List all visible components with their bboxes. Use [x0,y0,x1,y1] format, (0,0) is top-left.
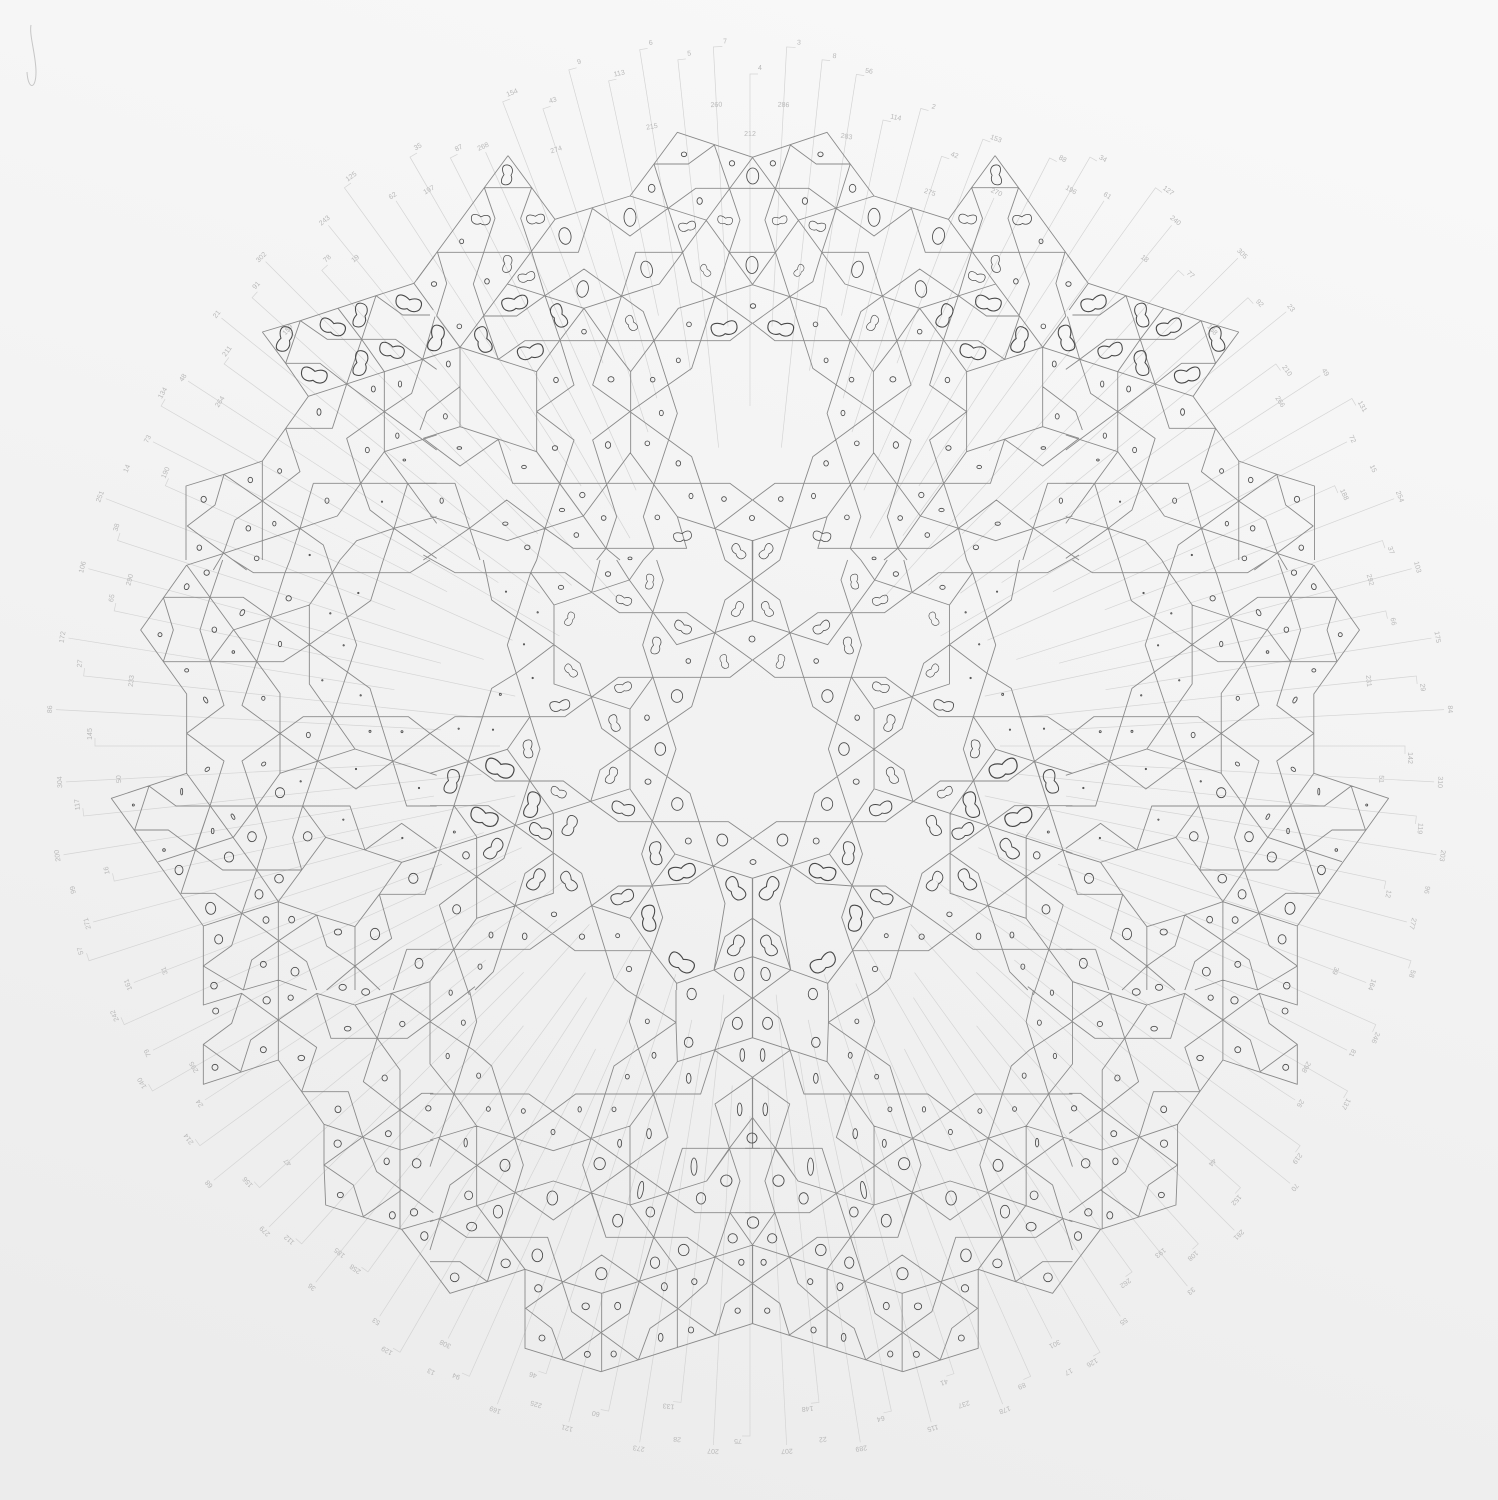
radial fan of leader lines with perimeter numbers: 75 [734,1437,742,1444]
lattice block: upper centre [410,132,753,561]
blobs: upper centre [427,152,747,561]
radial fan of leader lines with perimeter numbers: 65 [108,594,117,603]
radial fan of leader lines with perimeter numbers: 9 [576,58,582,66]
radial fan of leader lines with perimeter numbers: 27 [77,659,84,668]
radial fan of leader lines with perimeter numbers: 35 [413,142,423,152]
radial fan of leader lines with perimeter numbers: 16 [103,866,112,875]
radial fan of leader lines with perimeter numbers: 310 [1436,776,1443,788]
radial fan of leader lines with perimeter numbers: 200 [54,849,62,862]
radial fan of leader lines with perimeter numbers: 172 [59,631,67,644]
radial fan of leader lines with perimeter numbers: 113 [613,69,626,79]
radial fan of leader lines with perimeter numbers: 254 [1394,490,1405,504]
radial fan of leader lines with perimeter numbers: 231 [1364,675,1372,687]
radial fan of leader lines with perimeter numbers: 140 [137,1076,148,1090]
radial fan of leader lines with perimeter numbers: 4 [758,65,762,72]
radial fan of leader lines with perimeter numbers: 50 [116,775,123,783]
radial fan of leader lines with perimeter numbers: 134 [157,386,169,400]
radial fan of leader lines with perimeter numbers: 301 [1048,1338,1061,1349]
radial fan of leader lines with perimeter numbers: 305 [1235,248,1248,261]
radial fan of leader lines with perimeter numbers: 58 [1407,969,1416,978]
radial fan of leader lines with perimeter numbers: 260 [710,102,723,109]
radial fan of leader lines with perimeter numbers: 84 [1446,705,1453,714]
radial fan of leader lines with perimeter numbers: 185 [333,1246,347,1259]
radial fan of leader lines with perimeter numbers: 15 [1368,464,1377,474]
radial fan of leader lines with perimeter numbers: 23 [1285,303,1296,314]
radial fan of leader lines with perimeter numbers: 112 [283,1233,296,1246]
radial fan of leader lines with perimeter numbers: 103 [1412,561,1422,574]
radial fan of leader lines with perimeter numbers: 99 [69,885,78,894]
radial fan of leader lines with perimeter numbers: 96 [1422,885,1431,894]
lattice block: lower left [203,982,433,1267]
radial fan of leader lines with perimeter numbers: 14 [123,464,132,474]
radial fan of leader lines with perimeter numbers: 290 [125,573,135,587]
radial fan of leader lines with perimeter numbers: 119 [1415,823,1424,834]
radial fan of leader lines with perimeter numbers: 57 [76,946,86,956]
radial fan of leader lines with perimeter numbers: 304 [57,776,64,788]
radial fan of leader lines with perimeter numbers: 91 [252,280,262,291]
radial fan of leader lines with perimeter numbers: 219 [1290,1151,1303,1165]
radial fan of leader lines with perimeter numbers: 152 [1229,1193,1242,1206]
radial fan of leader lines with perimeter numbers: 51 [1377,775,1384,783]
radial fan of leader lines with perimeter numbers: 190 [161,466,172,480]
radial fan of leader lines with perimeter numbers: 298 [1300,1060,1312,1074]
radial fan of leader lines with perimeter numbers: 142 [1406,752,1413,764]
radial fan of leader lines with perimeter numbers: 281 [1232,1228,1245,1241]
radial fan of leader lines with perimeter numbers: 60 [591,1409,600,1417]
radial fan of leader lines with perimeter numbers: 7 [723,38,727,45]
radial fan of leader lines with perimeter numbers: 127 [1161,185,1175,198]
radial fan of leader lines with perimeter numbers: 55 [1118,1316,1129,1326]
radial fan of leader lines with perimeter numbers: 295 [188,1060,200,1074]
radial fan of leader lines with perimeter numbers: 42 [950,151,959,160]
radial fan of leader lines with perimeter numbers: 203 [1437,849,1446,862]
radial fan of leader lines with perimeter numbers: 39 [1330,966,1340,976]
radial fan of leader lines with perimeter numbers: 225 [530,1398,543,1409]
radial fan of leader lines with perimeter numbers: 8 [832,53,837,60]
radial fan of leader lines with perimeter numbers: 73 [143,434,153,444]
radial fan of leader lines with perimeter numbers: 131 [1356,400,1368,414]
lattice block: inner ring [423,540,753,998]
radial fan of leader lines with perimeter numbers: 115 [926,1423,939,1432]
radial fan of leader lines with perimeter numbers: 277 [1407,917,1417,930]
radial fan of leader lines with perimeter numbers: 211 [221,345,234,358]
radial fan of leader lines with perimeter numbers: 5 [687,50,692,58]
radial fan of leader lines with perimeter numbers: 246 [1369,1031,1381,1044]
radial fan of leader lines with perimeter numbers: 24 [195,1098,205,1108]
radial fan of leader lines with perimeter numbers: 207 [707,1447,719,1454]
radial fan of leader lines with perimeter numbers: 159 [282,323,295,337]
radial fan of leader lines with perimeter numbers: 137 [1339,1097,1351,1111]
blobs: inner ring [443,572,748,981]
radial fan of leader lines with perimeter numbers: 92 [1254,298,1265,309]
radial fan of leader lines with perimeter numbers: 106 [78,561,88,574]
radial fan of leader lines with perimeter numbers: 44 [1207,1157,1217,1167]
right half of the lattice, mirrored from the left [745,132,1389,1372]
radial fan of leader lines with perimeter numbers: 126 [1085,1356,1099,1368]
radial fan of leader lines with perimeter numbers: 188 [1338,488,1349,502]
blobs: upper left outer [197,294,423,561]
radial fan of leader lines with perimeter numbers: 266 [1274,395,1286,409]
radial fan of leader lines with perimeter numbers: 29 [1418,683,1426,692]
radial fan of leader lines with perimeter numbers: 242 [110,1009,121,1022]
blobs: lower left [212,989,431,1240]
radial fan of leader lines with perimeter numbers: 12 [1383,889,1392,898]
radial fan of leader lines with perimeter numbers: 2 [931,103,936,111]
radial fan of leader lines with perimeter numbers: 169 [489,1404,502,1415]
radial fan of leader lines with perimeter numbers: 53 [371,1316,382,1326]
radial fan of leader lines with perimeter numbers: 56 [865,68,873,76]
radial fan of leader lines with perimeter numbers: 19 [350,254,361,264]
radial fan of leader lines with perimeter numbers: 129 [380,1344,394,1356]
radial fan of leader lines with perimeter numbers: 81 [1347,1048,1357,1058]
radial fan of leader lines with perimeter numbers: 275 [923,188,936,198]
radial fan of leader lines with perimeter numbers: 87 [454,144,464,153]
radial fan of leader lines with perimeter numbers: 237 [957,1399,970,1409]
radial fan of leader lines with perimeter numbers: 196 [1064,184,1078,196]
radial fan of leader lines with perimeter numbers: 66 [1388,617,1397,626]
radial fan of leader lines with perimeter numbers: 38 [112,523,122,532]
radial fan of leader lines with perimeter numbers: 210 [1280,364,1293,378]
radial fan of leader lines with perimeter numbers: 197 [422,184,436,196]
blobs: middle left [132,570,423,990]
radial fan of leader lines with perimeter numbers: 3 [797,39,801,47]
radial fan of leader lines with perimeter numbers: 125 [345,171,358,183]
lattice block: lower centre [430,982,760,1372]
radial fan of leader lines with perimeter numbers: 68 [204,1178,215,1189]
radial fan of leader lines with perimeter numbers: 243 [318,215,332,227]
radial fan of leader lines with perimeter numbers: 26 [1295,1098,1305,1108]
signature mark [27,25,36,86]
radial fan of leader lines with perimeter numbers: 94 [451,1371,462,1380]
radial fan of leader lines with perimeter numbers: 279 [259,1224,272,1237]
radial fan of leader lines with perimeter numbers: 18 [1139,254,1150,264]
radial fan of leader lines with perimeter numbers: 161 [123,978,134,991]
lattice block: upper left outer [186,255,437,570]
radial fan of leader lines with perimeter numbers: 148 [801,1404,814,1412]
radial fan of leader lines with perimeter numbers: 175 [1433,631,1441,644]
radial fan of leader lines with perimeter numbers: 48 [178,373,189,383]
radial fan of leader lines with perimeter numbers: 36 [307,1281,318,1292]
radial fan of leader lines with perimeter numbers: 268 [477,142,490,153]
radial fan of leader lines with perimeter numbers: 6 [648,40,653,47]
radial fan of leader lines with perimeter numbers: 193 [1153,1246,1167,1259]
radial fan of leader lines with perimeter numbers: 114 [890,113,902,123]
radial fan of leader lines with perimeter numbers: 61 [1102,191,1112,201]
left half of the lattice with enclosed blobs [111,132,760,1372]
radial fan of leader lines with perimeter numbers: 145 [87,728,94,740]
radial fan of leader lines with perimeter numbers: 78 [322,254,333,264]
radial fan of leader lines with perimeter numbers: 72 [1347,434,1357,444]
radial fan of leader lines with perimeter numbers: 178 [998,1404,1011,1415]
radial fan of leader lines with perimeter numbers: 89 [1016,1381,1027,1390]
radial fan of leader lines with perimeter numbers: 62 [388,191,398,201]
radial fan of leader lines with perimeter numbers: 79 [143,1048,153,1058]
radial fan of leader lines with perimeter numbers: 133 [662,1402,675,1410]
radial fan of leader lines with perimeter numbers: 17 [1063,1366,1074,1376]
radial fan of leader lines with perimeter numbers: 308 [439,1338,452,1349]
radial fan of leader lines with perimeter numbers: 88 [1057,154,1068,164]
radial fan of leader lines with perimeter numbers: 292 [1365,573,1375,587]
radial fan of leader lines with perimeter numbers: 70 [1289,1182,1300,1192]
blobs: lower centre [446,988,745,1357]
radial fan of leader lines with perimeter numbers: 13 [426,1366,437,1376]
radial fan of leader lines with perimeter numbers: 158 [1205,323,1218,337]
radial fan of leader lines with perimeter numbers: 286 [778,102,790,109]
radial fan of leader lines with perimeter numbers: 212 [744,131,756,138]
radial fan of leader lines with perimeter numbers: 108 [1186,1249,1199,1262]
radial fan of leader lines with perimeter numbers: 153 [989,134,1003,145]
radial fan of leader lines with perimeter numbers: 283 [840,133,853,141]
radial fan of leader lines with perimeter numbers: 43 [548,96,558,105]
radial fan of leader lines with perimeter numbers: 251 [95,490,106,503]
radial fan of leader lines with perimeter numbers: 207 [781,1447,793,1454]
radial fan of leader lines with perimeter numbers: 273 [632,1443,645,1452]
radial fan of leader lines with perimeter numbers: 214 [183,1132,195,1145]
radial fan of leader lines with perimeter numbers: 22 [818,1435,827,1443]
radial fan of leader lines with perimeter numbers: 156 [242,1175,255,1188]
radial fan of leader lines with perimeter numbers: 240 [1168,215,1182,227]
radial fan of leader lines with perimeter numbers: 164 [1366,978,1377,991]
radial fan of leader lines with perimeter numbers: 121 [561,1423,574,1432]
radial fan of leader lines with perimeter numbers: 28 [673,1435,681,1443]
radial fan of leader lines with perimeter numbers: 215 [646,123,658,132]
blobs sitting on the central axis [746,168,759,1228]
radial fan of leader lines with perimeter numbers: 154 [506,88,519,99]
radial fan of leader lines with perimeter numbers: 21 [212,309,223,320]
radial fan of leader lines with perimeter numbers: 274 [550,145,563,155]
radial fan of leader lines with perimeter numbers: 271 [83,917,93,930]
radial fan of leader lines with perimeter numbers: 289 [855,1443,867,1452]
radial fan of leader lines with perimeter numbers: 34 [1098,154,1108,164]
radial fan of leader lines with perimeter numbers: 33 [1186,1285,1196,1296]
lattice block: middle left [111,560,437,990]
radial fan of leader lines with perimeter numbers: 37 [1386,546,1395,555]
radial fan of leader lines with perimeter numbers: 264 [214,395,227,409]
radial fan of leader lines with perimeter numbers: 47 [283,1157,293,1167]
radial fan of leader lines with perimeter numbers: 46 [528,1370,538,1379]
radial fan of leader lines with perimeter numbers: 302 [255,251,268,264]
radial fan of leader lines with perimeter numbers: 262 [1118,1276,1132,1289]
radial fan of leader lines with perimeter numbers: 64 [876,1414,885,1422]
radial fan of leader lines with perimeter numbers: 258 [349,1262,362,1275]
radial fan of leader lines with perimeter numbers: 233 [128,675,136,687]
radial fan of leader lines with perimeter numbers: 270 [990,187,1003,198]
radial fan of leader lines with perimeter numbers: 117 [74,799,82,810]
radial fan of leader lines with perimeter numbers: 86 [47,705,54,713]
radial fan of leader lines with perimeter numbers: 49 [1320,367,1330,378]
radial fan of leader lines with perimeter numbers: 31 [160,966,170,975]
radial fan of leader lines with perimeter numbers: 41 [939,1377,949,1386]
radial fan of leader lines with perimeter numbers: 77 [1185,270,1195,280]
